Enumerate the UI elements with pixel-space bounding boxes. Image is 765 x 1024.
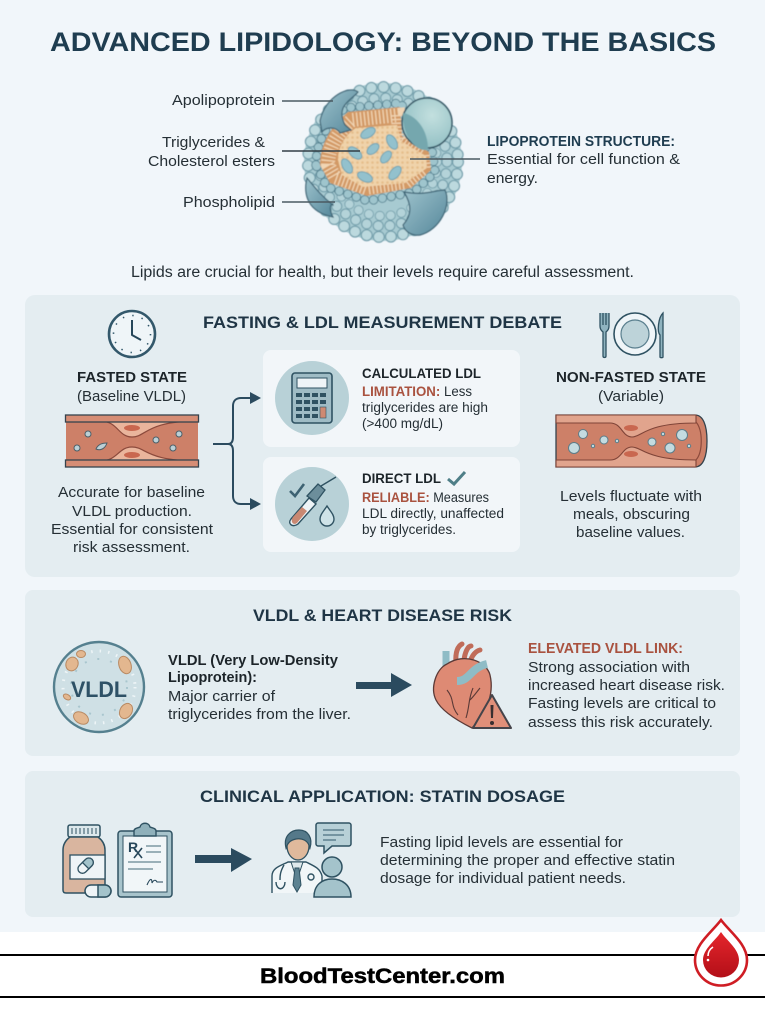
label: apolipoprotein: Apolipoprotein [172, 93, 275, 109]
non-fasted state description [560, 489, 702, 541]
non-fasted state heading: (Variable) [598, 389, 664, 405]
label: lipoprotein structure [410, 134, 680, 187]
fasted state heading: FASTED STATE [77, 370, 187, 386]
footer [0, 920, 765, 998]
calculated LDL text [362, 366, 488, 431]
label: lipoprotein structure: Essential for cell function & [487, 152, 680, 168]
direct LDL text: DIRECT LDL [362, 471, 441, 486]
statin description: dosage for individual patient needs. [380, 871, 626, 887]
card: calculated LDL [263, 350, 520, 447]
fasted state description [51, 485, 213, 556]
fasted state description: VLDL production. [72, 504, 192, 520]
icon: prescription clipboard [118, 823, 172, 897]
icon: dropper [275, 467, 349, 541]
VLDL description: Lipoprotein): [168, 670, 257, 686]
fasted state heading: (Baseline VLDL) [77, 389, 186, 405]
calculated LDL text: triglycerides are high [362, 400, 488, 415]
non-fasted state description: Levels fluctuate with [560, 489, 702, 505]
illustration: lipoprotein particle [304, 83, 462, 241]
calculated LDL text: (>400 mg/dL) [362, 416, 443, 431]
illustration: fasted artery [66, 415, 198, 467]
fasted state description: Essential for consistent [51, 522, 213, 538]
VLDL description: triglycerides from the liver. [168, 707, 351, 723]
footer brand: BloodTestCenter.com [260, 965, 505, 988]
panel: fasting and LDL measurement debate [25, 295, 740, 577]
non-fasted state heading [556, 370, 706, 405]
elevated VLDL text: assess this risk accurately. [528, 715, 713, 731]
icon: VLDL particle: VLDL [71, 677, 127, 702]
non-fasted state description: meals, obscuring [573, 507, 690, 523]
icon: doctor and patient [272, 823, 351, 897]
non-fasted state description: baseline values. [576, 525, 685, 541]
heading: VLDL and heart disease: VLDL & HEART DISEASE RISK [253, 607, 512, 625]
fasted state description: risk assessment. [73, 540, 190, 556]
VLDL description: VLDL (Very Low-Density [168, 653, 338, 669]
arrow: prescription to doctor [195, 848, 252, 872]
panel: VLDL and heart disease risk [25, 590, 740, 756]
label: triglycerides and cholesterol esters: Triglycerides & [162, 135, 265, 151]
fasted state description: Accurate for baseline [58, 485, 205, 501]
calculated LDL text: CALCULATED LDL [362, 366, 481, 381]
VLDL description: Major carrier of [168, 689, 276, 705]
label: lipoprotein structure: energy. [487, 171, 538, 187]
elevated VLDL text: ELEVATED VLDL LINK: [528, 641, 683, 657]
icon: clock [109, 311, 155, 357]
heading: fasting and LDL: FASTING & LDL MEASUREMENT DEBATE [203, 314, 562, 332]
intro sentence: Lipids are crucial for health, but their levels require careful assessment. [131, 264, 634, 281]
label: triglycerides and cholesterol esters [148, 135, 360, 170]
label: lipoprotein structure: LIPOPROTEIN STRUCTURE: [487, 134, 675, 150]
icon: heart with warning [434, 644, 511, 728]
elevated VLDL text [528, 641, 725, 731]
icon: VLDL particle [54, 642, 144, 732]
arrow: VLDL to heart [356, 673, 412, 697]
panel: clinical application [25, 771, 740, 917]
label: phospholipid: Phospholipid [183, 195, 275, 211]
statin description: Fasting lipid levels are essential for [380, 835, 623, 851]
heading: statin dosage: CLINICAL APPLICATION: STATIN DOSAGE [200, 788, 565, 806]
elevated VLDL text: increased heart disease risk. [528, 678, 725, 694]
VLDL description [168, 653, 351, 723]
illustration: non-fasted artery [556, 415, 707, 467]
statin description: determining the proper and effective statin [380, 853, 675, 869]
label: triglycerides and cholesterol esters: Cholesterol esters [148, 154, 275, 170]
icon: medicine bottle [63, 825, 111, 897]
direct LDL text: RELIABLE: Measures [362, 490, 489, 505]
icon: plate and cutlery [600, 313, 663, 358]
title: ADVANCED LIPIDOLOGY: BEYOND THE BASICS [50, 27, 716, 57]
direct LDL text: by triglycerides. [362, 522, 456, 537]
icon: calculator [275, 361, 349, 435]
statin description [380, 835, 675, 887]
fasted state heading [77, 370, 187, 405]
calculated LDL text: LIMITATION: Less [362, 384, 472, 399]
direct LDL text [362, 471, 504, 537]
icon: blood drop logo [695, 920, 747, 986]
direct LDL text: LDL directly, unaffected [362, 506, 504, 521]
elevated VLDL text: Strong association with [528, 660, 690, 676]
icon: prescription clipboard: R [128, 839, 138, 855]
elevated VLDL text: Fasting levels are critical to [528, 696, 716, 712]
non-fasted state heading: NON-FASTED STATE [556, 370, 706, 386]
lipoprotein diagram [148, 83, 680, 241]
arrow: bracket to LDL methods [213, 392, 261, 510]
card: direct LDL [263, 457, 520, 552]
